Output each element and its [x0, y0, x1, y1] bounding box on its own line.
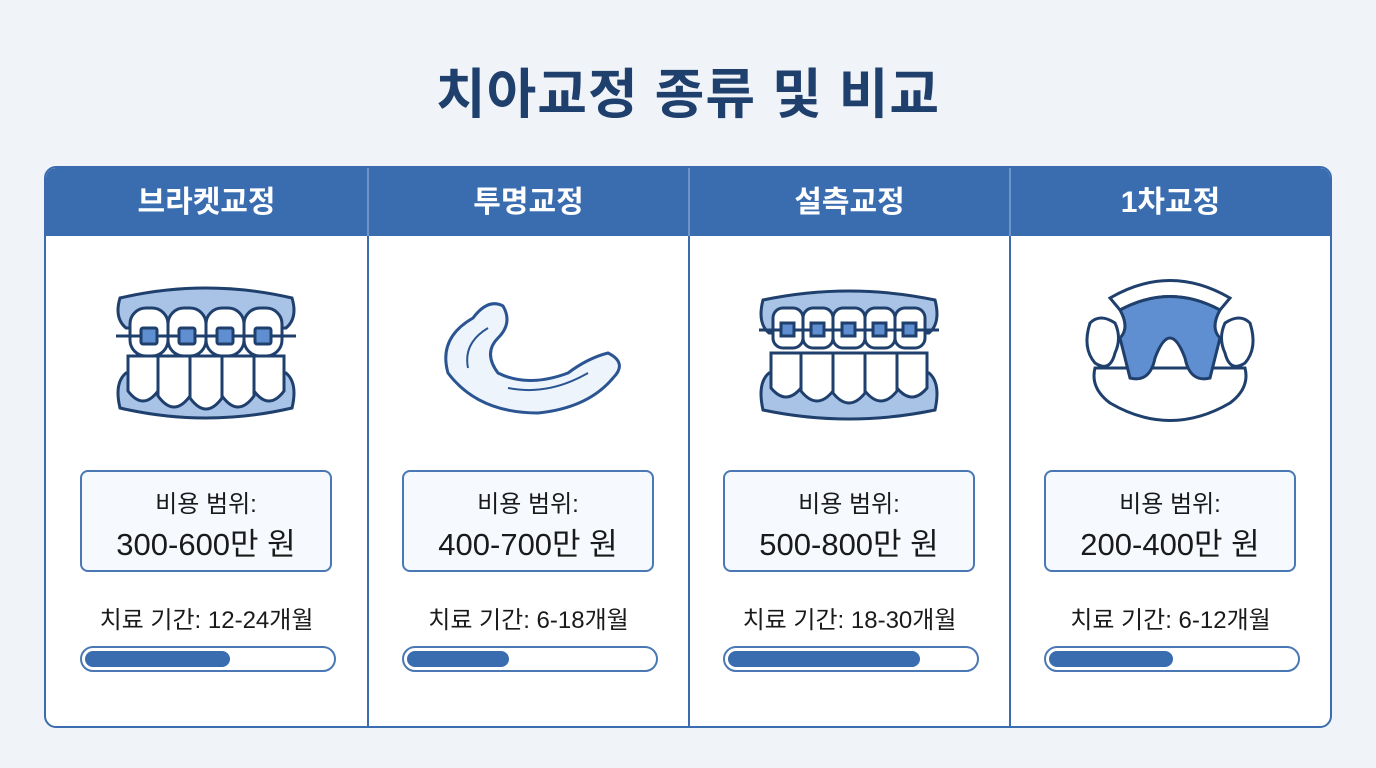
- cost box: [402, 470, 654, 572]
- duration: 치료 기간: 6-18개월: [428, 607, 629, 634]
- icon: braces: [116, 286, 296, 420]
- header: bracket: [46, 168, 367, 236]
- cost box: 200-400만 원: [1080, 527, 1260, 562]
- comparison card: [44, 166, 1332, 728]
- duration: 치료 기간: 18-30개월: [743, 607, 956, 634]
- icon: lingual braces: [759, 290, 939, 420]
- header: lingual: [689, 168, 1010, 236]
- duration: 치료 기간: 6-12개월: [1070, 607, 1271, 634]
- panel: lingual: [690, 168, 1009, 672]
- title: 치아교정 종류 및 비교: [436, 65, 940, 125]
- cost box: 비용 범위:: [477, 491, 579, 518]
- cost box: [1044, 470, 1296, 572]
- header: clear: 투명교정: [473, 186, 584, 219]
- progress bar: [402, 646, 658, 672]
- cost box: 400-700만 원: [438, 527, 618, 562]
- duration: 치료 기간: 12-24개월: [100, 607, 313, 634]
- header: lingual: 설측교정: [794, 186, 905, 219]
- cost box: [80, 470, 332, 572]
- progress bar: [80, 646, 336, 672]
- panel: bracket: [46, 168, 367, 672]
- panel: clear aligner: [369, 168, 688, 672]
- cost box: [723, 470, 975, 572]
- progress bar: [1044, 646, 1300, 672]
- progress bar: [723, 646, 979, 672]
- header: bracket: 브라켓교정: [138, 186, 276, 219]
- icon: retainer: [1085, 279, 1255, 422]
- header: clear: [368, 168, 689, 236]
- icon: aligner: [444, 302, 621, 414]
- cost box: 300-600만 원: [116, 527, 296, 562]
- panel: phase 1: [1011, 168, 1330, 672]
- header: phase 1: [1010, 168, 1331, 236]
- cost box: 비용 범위:: [155, 491, 257, 518]
- cost box: 비용 범위:: [798, 491, 900, 518]
- header: phase 1: 1차교정: [1121, 186, 1220, 219]
- cost box: 500-800만 원: [759, 527, 939, 562]
- cost box: 비용 범위:: [1119, 491, 1221, 518]
